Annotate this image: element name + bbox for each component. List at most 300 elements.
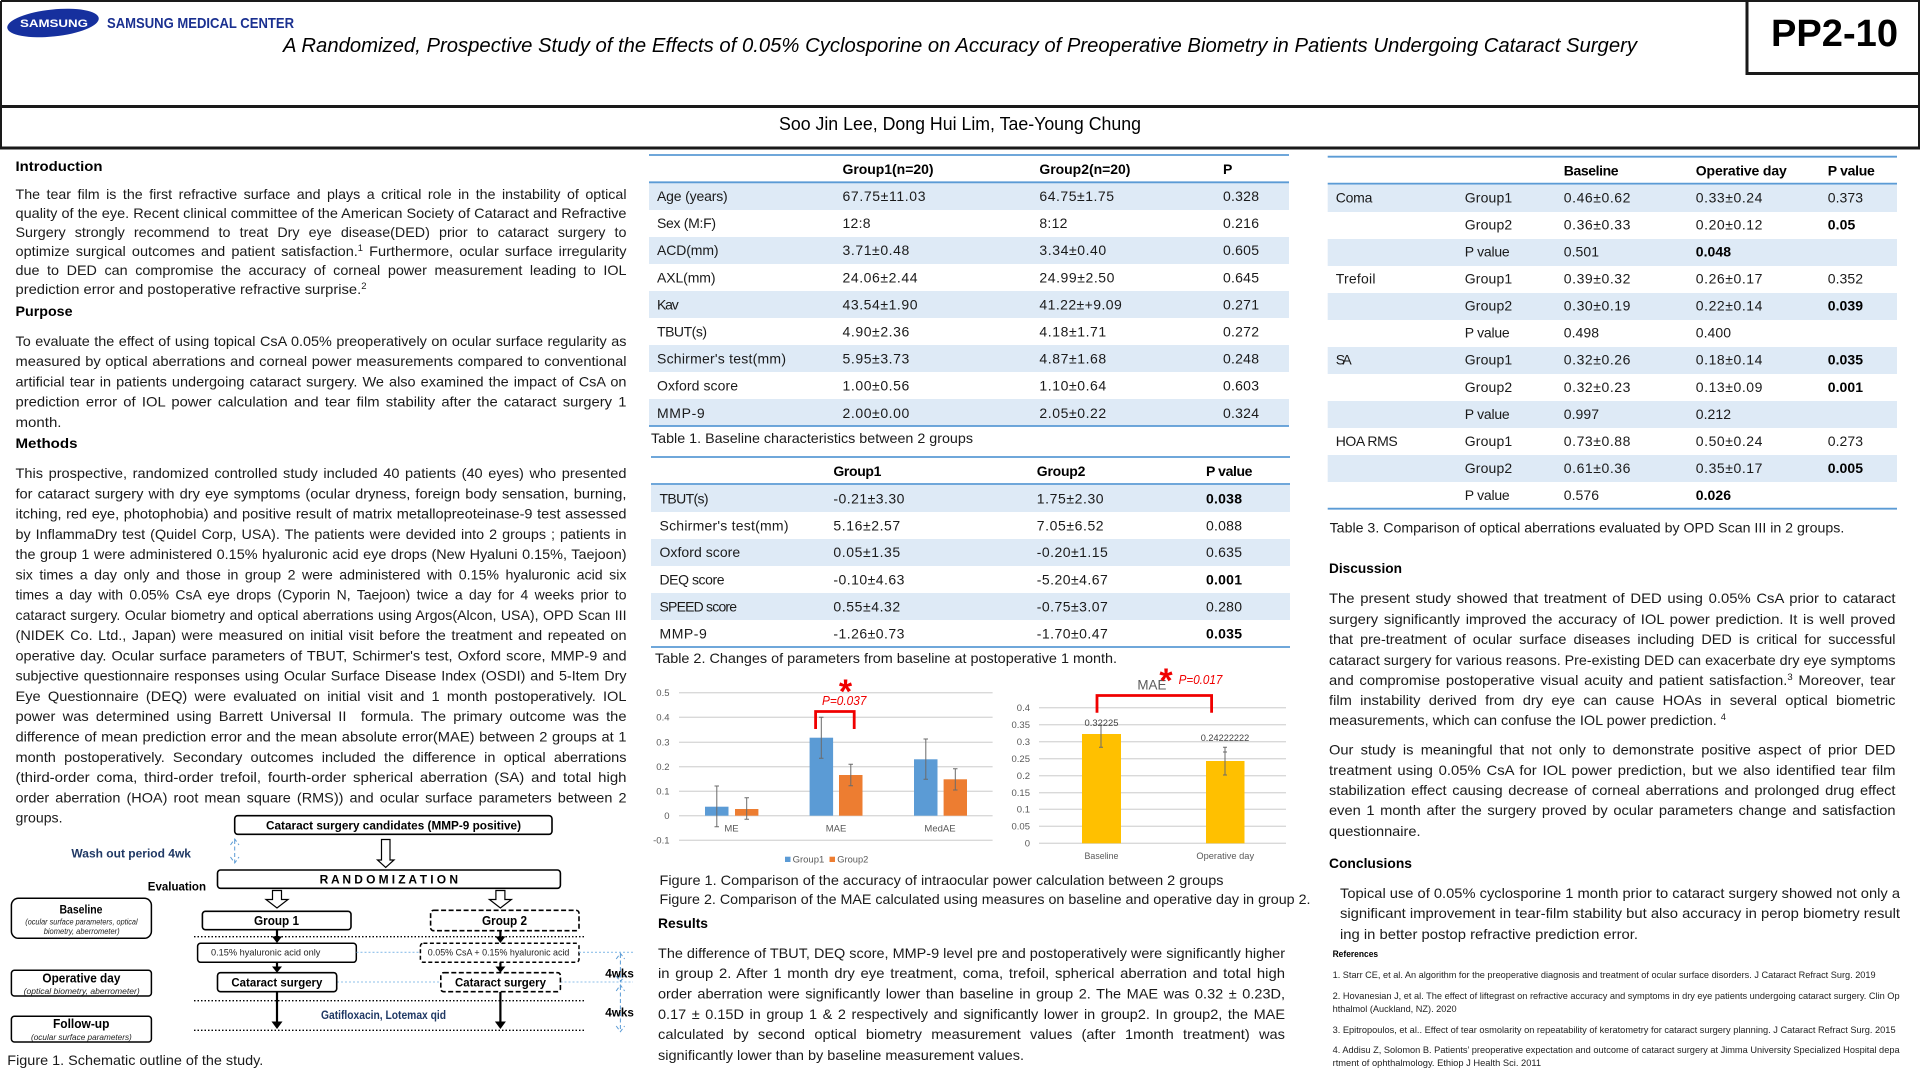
- text: methods body: order aberration (HOA) root mean square (RMS)) and ocular surface parameters between 2: [16, 789, 627, 805]
- y axis labels: 0.05: [1012, 822, 1030, 833]
- text: discussion first paragraph: surgery significantly improved the accuracy of IOL power prediction. It is well proved: [1329, 611, 1896, 627]
- table 1 rows: 41.22±+9.09: [1039, 296, 1122, 312]
- table 2 rows: 0.635: [1206, 544, 1242, 560]
- text: methods body: six times a day only and those in group 2 were administered with 0.15% hyaluronic acid six: [16, 566, 626, 582]
- text: introduction body: due to DED can compromise the accuracy of corneal power measurement leading to IOL: [16, 262, 627, 278]
- arrow: group 1 to hyaluronic: [276, 930, 278, 937]
- box: baseline evaluation: (ocular surface parameters, optical: [25, 917, 138, 926]
- text: introduction body: 2: [361, 281, 366, 291]
- y axis labels: -0.1: [653, 836, 670, 847]
- heading: conclusions: Conclusions: [1329, 855, 1412, 871]
- table 3 SA rows: 0.997: [1564, 406, 1599, 422]
- table 3 coma rows: 0.46±0.62: [1564, 189, 1631, 205]
- text: methods body: groups.: [16, 810, 62, 826]
- arrow: 4 weeks intervals: [616, 953, 625, 1032]
- table 2 header: Group1: [833, 463, 882, 479]
- y axis labels: 0.4: [1017, 703, 1030, 714]
- box: cataract surgery candidates: [235, 816, 552, 834]
- table 1 header: Group2(n=20): [1039, 161, 1130, 177]
- text: introduction body: 1: [358, 243, 363, 253]
- panel: references: [1333, 949, 1900, 1069]
- text: discussion second paragraph: even 1 month after the surgery proved by ocular parameters change and satisfaction: [1329, 802, 1896, 818]
- captions: figures 1 and 2: Figure 1. Comparison of the accuracy of intraocular power calculation between 2 groups: [660, 872, 1224, 888]
- captions: figures 1 and 2: [660, 872, 1310, 907]
- text: methods body: cataract surgery. Ocular biometry and optical aberrations using Argos(Alcon, USA), OPD Scan III: [16, 607, 626, 623]
- flowchart: schematic outline of the study: [7, 816, 634, 1068]
- p value label: P=0.017: [1179, 673, 1223, 687]
- table 3 HOA RMS rows: [1336, 433, 1863, 503]
- table 1 rows: 1.00±0.56: [842, 378, 910, 394]
- table 2 rows: -5.20±4.67: [1037, 572, 1108, 588]
- table 2 rows: 0.55±4.32: [833, 598, 900, 614]
- table 3 coma rows: Group1: [1465, 189, 1512, 205]
- category labels: Baseline: [1084, 851, 1118, 862]
- table 3 SA rows: 0.001: [1828, 379, 1863, 395]
- box: baseline evaluation: [11, 898, 151, 938]
- table 3 HOA RMS rows: HOA RMS: [1336, 433, 1398, 449]
- text: results body: significantly lower than by baseline measurement values.: [658, 1047, 1024, 1063]
- table 3 SA rows: 0.035: [1828, 352, 1863, 368]
- table 3 coma rows: 0.373: [1828, 189, 1863, 205]
- heading: references: References: [1333, 949, 1378, 960]
- text: results body: calculated by second optical biometry measurement values (after 1month treatment) was: [658, 1026, 1285, 1042]
- samsung logo: SAMSUNG: [20, 18, 88, 30]
- text: discussion first paragraph: 4: [1721, 712, 1726, 722]
- y axis labels: [1012, 703, 1030, 850]
- table 2 rows: -0.75±3.07: [1037, 598, 1108, 614]
- arrow: to randomization: [378, 840, 394, 868]
- y axis labels: 0.2: [1017, 771, 1030, 782]
- table 2 rows: 0.038: [1206, 490, 1242, 506]
- samsung logo: SAMSUNG MEDICAL CENTER: [107, 15, 294, 32]
- panel: purpose: [16, 303, 627, 430]
- box: cataract surgery candidates: Cataract surgery candidates (MMP-9 positive): [266, 818, 521, 832]
- text: discussion first paragraph: measurements, which can confuse the IOL power prediction.: [1329, 712, 1704, 728]
- text: methods body: operative day. Ocular surface parameters of TBUT, Schirmer's test, Oxford score, MMP-9 and: [16, 647, 626, 663]
- label: 4wks lower: 4wks: [605, 1006, 634, 1020]
- error bars: [1099, 724, 1227, 775]
- table 3 header: Baseline: [1564, 162, 1619, 178]
- text: introduction body: Furthermore, ocular surface irregularity: [363, 243, 626, 259]
- arrow: group 1 follow-up: [276, 992, 278, 1022]
- table 1 rows: [657, 188, 1259, 421]
- table 2 rows: SPEED score: [660, 598, 737, 614]
- text: purpose body: To evaluate the effect of using topical CsA 0.05% preoperatively on ocular surface regularity as: [16, 333, 626, 349]
- table 2 rows: [660, 490, 1242, 642]
- text: purpose body: prediction error of IOL power calculation and tear film stability after the cataract surgery 1: [16, 394, 627, 410]
- table 3 SA rows: SA: [1336, 352, 1352, 368]
- text: discussion first paragraph: and compromise postoperative visual acuity and patient satisfaction.: [1329, 672, 1762, 688]
- table 1 rows: 0.605: [1223, 242, 1259, 258]
- table 1 rows: 43.54±1.90: [842, 296, 918, 312]
- table 3 HOA RMS rows: 0.50±0.24: [1696, 433, 1763, 449]
- text: methods body: [16, 465, 627, 826]
- text: methods body: for cataract surgery with dry eye symptoms (ocular dryness, foreign body sensation, burning,: [16, 485, 626, 501]
- chart: accuracy of intraocular power calculation: [653, 673, 993, 866]
- text: results body: order aberration were significantly lower than baseline in group 2. The MAE was 0.32 ± 0.23D,: [658, 986, 1285, 1002]
- box: follow-up evaluation: (ocular surface parameters): [31, 1033, 132, 1042]
- table 2 rows: Schirmer's test(mm): [660, 517, 788, 533]
- table 1 rows: 24.99±2.50: [1039, 270, 1115, 286]
- table 2 rows: -0.10±4.63: [833, 572, 905, 588]
- panel: introduction: [16, 158, 627, 297]
- table 1 rows: 2.00±0.00: [842, 405, 910, 421]
- y axis labels: 0.5: [656, 688, 670, 699]
- y axis labels: 0.25: [1012, 754, 1030, 765]
- table 1 rows: 0.216: [1223, 215, 1259, 231]
- table 3 HOA RMS rows: P value: [1465, 487, 1510, 503]
- value labels: 0.32225: [1084, 718, 1118, 729]
- table 3 header: [1564, 162, 1875, 178]
- text: methods body: itching, red eye, photophobia) and positive result of matrix metallopreoteinase-9 test assessed: [16, 506, 626, 522]
- value labels: 0.24222222: [1201, 733, 1249, 744]
- y axis labels: 0.1: [1017, 805, 1030, 816]
- text: conclusions body: Topical use of 0.05% cyclosporine 1 month prior to cataract surgery showed not only a: [1340, 885, 1900, 901]
- table 3 SA rows: [1336, 352, 1863, 422]
- table 1 rows: ACD(mm): [657, 242, 719, 258]
- box: operative day evaluation: (optical biometry, aberrometer): [24, 987, 140, 996]
- table 3 SA rows: 0.13±0.09: [1696, 379, 1763, 395]
- table 1 rows: 4.90±2.36: [842, 324, 910, 340]
- panel: results: [658, 915, 1285, 1063]
- caption: table 1: Table 1. Baseline characteristics between 2 groups: [651, 430, 973, 446]
- p value label: P=0.037: [822, 694, 867, 708]
- label: evaluation: Evaluation: [148, 880, 206, 894]
- arrow: to group 2: [489, 890, 511, 908]
- table 3 HOA RMS rows: Group1: [1465, 433, 1512, 449]
- table 3 SA rows: 0.32±0.23: [1564, 379, 1631, 395]
- table 3 SA rows: Group1: [1465, 352, 1512, 368]
- text: reference list: 4. Addisu Z, Solomon B. Patients’ preoperative expectation and outcome of cataract surgery at Jimma University Specialized Hospital depa: [1333, 1045, 1900, 1056]
- table 3 trefoil rows: 0.22±0.14: [1696, 298, 1763, 314]
- label: wash out period: Wash out period 4wk: [71, 847, 191, 861]
- table 3 coma rows: 0.36±0.33: [1564, 216, 1631, 232]
- table 3 coma rows: 0.048: [1696, 244, 1731, 260]
- table 3 SA rows: Group2: [1465, 379, 1512, 395]
- text: methods body: Eye Questionnaire (DEQ) were evaluated on initial visit and 1 month postoperatively. IOL: [16, 688, 627, 704]
- table 1 rows: 8:12: [1039, 215, 1068, 231]
- table 1: baseline characteristics: [649, 155, 1289, 446]
- table 1 rows: 67.75±11.03: [842, 188, 926, 204]
- table 1 rows: 12:8: [842, 215, 871, 231]
- box: randomization: [218, 870, 560, 888]
- bars: group 1: [705, 738, 938, 816]
- text: introduction body: quality of the eye. Recent clinical committee of the American Society of Cataract and Refractive: [16, 205, 627, 221]
- table 3 coma rows: P value: [1465, 244, 1510, 260]
- caption: figure 1 schematic: Figure 1. Schematic outline of the study.: [7, 1052, 263, 1068]
- text: reference list: 3. Epitropoulos, et al.. Effect of tear osmolarity on repeatability of keratometry for cataract surgery planning. J Cataract Refract Surg. 2015: [1333, 1025, 1896, 1036]
- table 3 HOA RMS rows: 0.005: [1828, 460, 1863, 476]
- table 1 rows: Kav: [657, 296, 679, 312]
- box: cataract surgery group 1: Cataract surgery: [231, 976, 323, 990]
- text: purpose body: artificial tear in patients undergoing cataract surgery. We also examined the impact of CsA on: [16, 373, 626, 389]
- heading: purpose: Purpose: [16, 303, 73, 319]
- table 1 rows: 0.645: [1223, 270, 1259, 286]
- y axis labels: 0.3: [656, 738, 670, 749]
- panel: conclusions: [1329, 855, 1900, 942]
- heading: methods: Methods: [16, 435, 78, 451]
- table 3 trefoil rows: 0.498: [1564, 325, 1599, 341]
- significance asterisk: *: [1159, 662, 1173, 700]
- arrow: hyaluronic to surgery: [276, 962, 278, 967]
- arrow: group 2 follow-up: [499, 992, 501, 1022]
- category labels: MedAE: [924, 824, 956, 835]
- table 3 trefoil rows: [1336, 270, 1863, 341]
- category labels: [1084, 851, 1254, 862]
- text: discussion second paragraph: questionnaire.: [1329, 823, 1420, 839]
- table 3 HOA RMS rows: 0.273: [1828, 433, 1863, 449]
- box: baseline evaluation: Baseline: [60, 902, 103, 916]
- table 3 coma rows: [1336, 189, 1863, 260]
- text: reference list: 1. Starr CE, et al. An algorithm for the preoperative diagnosis and treatment of ocular surface disorders. J Cataract Refract Surg. 2019: [1333, 970, 1876, 981]
- text: methods body: month postoperatively. Secondary outcomes included the difference in optical aberrations: [16, 749, 626, 765]
- box: operative day evaluation: Operative day: [42, 970, 121, 985]
- table 1 rows: 2.05±0.22: [1039, 405, 1106, 421]
- heading: discussion: Discussion: [1329, 560, 1402, 576]
- text: discussion second paragraph: treatment using 0.05% CsA for IOL power prediction, but we also identified tear film: [1329, 762, 1896, 778]
- table 2 rows: -1.26±0.73: [833, 626, 905, 642]
- table 1 rows: 3.71±0.48: [842, 242, 910, 258]
- text: purpose body: month.: [16, 414, 62, 430]
- heading: introduction: Introduction: [16, 158, 102, 174]
- table 1 header: Group1(n=20): [842, 161, 934, 177]
- panel: methods: [16, 435, 627, 826]
- table 1 rows: 0.324: [1223, 405, 1259, 421]
- box: hyaluronic acid only: 0.15% hyaluronic acid only: [211, 948, 321, 958]
- y axis labels: 0.15: [1012, 788, 1030, 799]
- table 1 rows: Schirmer's test(mm): [657, 350, 786, 366]
- legend: Group2: [837, 854, 868, 866]
- legend: [785, 854, 868, 866]
- table 3 coma rows: 0.05: [1828, 216, 1856, 232]
- table 3 trefoil rows: 0.26±0.17: [1696, 270, 1763, 286]
- table 3 HOA RMS rows: Group2: [1465, 460, 1512, 476]
- text: introduction body: Surgery strongly recommend to treat Dry eye disease(DED) prior to cataract surgery to: [16, 224, 627, 240]
- table 3 HOA RMS rows: 0.576: [1564, 487, 1599, 503]
- text: reference list: rtment of ophthalmology. Ethiop J Health Sci. 2011: [1333, 1058, 1541, 1069]
- table 1 rows: 4.87±1.68: [1039, 350, 1106, 366]
- table 1 rows: 0.272: [1223, 324, 1259, 340]
- text: methods body: the group 1 were administered 0.15% hyaluronic acid eye drops (New Hyaluni 0.15%, Taejoon): [16, 546, 626, 562]
- arrow: csa to surgery: [499, 962, 501, 967]
- text: methods body: (NIDEK Co. Ltd., Japan) were measured on initial visit before the treatment and repeated on: [16, 627, 626, 643]
- box: follow-up evaluation: Follow-up: [53, 1016, 109, 1031]
- table 1 rows: 0.328: [1223, 188, 1259, 204]
- text: discussion first paragraph: cataract surgery for various reasons. Pre-existing DED can exacerbate dry eye symptoms: [1329, 652, 1896, 668]
- bars: group 2: [735, 775, 967, 816]
- label: 4wks upper: 4wks: [605, 967, 634, 981]
- table 2 rows: Oxford score: [660, 544, 740, 560]
- header banner: [0, 0, 1920, 148]
- category labels: ME: [724, 824, 739, 835]
- text: methods body: This prospective, randomized controlled study included 40 patients (40 eyes) who presented: [16, 465, 626, 481]
- table 3 SA rows: 0.32±0.26: [1564, 352, 1631, 368]
- value labels: [1084, 718, 1249, 744]
- table 2 rows: 0.001: [1206, 572, 1242, 588]
- table 1 rows: TBUT(s): [657, 324, 707, 340]
- text: methods body: (third-order coma, third-order trefoil, fourth-order spherical aberration (SA) and total high: [16, 769, 626, 785]
- table 3 HOA RMS rows: 0.35±0.17: [1696, 460, 1763, 476]
- y axis labels: 0.4: [656, 713, 670, 724]
- text: methods body: power was determined using Barrett Universal II formula. The primary outcome was the: [16, 708, 627, 724]
- text: purpose body: [16, 333, 627, 430]
- table 1 rows: 4.18±1.71: [1039, 324, 1106, 340]
- poster number box: PP2-10: [1771, 13, 1898, 55]
- table 3 SA rows: 0.212: [1696, 406, 1731, 422]
- table 3 HOA RMS rows: 0.61±0.36: [1564, 460, 1631, 476]
- table 1 rows: 0.248: [1223, 350, 1259, 366]
- box: group 1: [202, 911, 351, 930]
- table 3 trefoil rows: Group2: [1465, 298, 1512, 314]
- text: results body: [658, 945, 1285, 1063]
- text: purpose body: measured by optical aberrations and corneal power measurements compared to conventional: [16, 353, 626, 369]
- box: csa and hyaluronic acid: [420, 943, 579, 962]
- table 3 coma rows: Group2: [1465, 216, 1512, 232]
- box: cataract surgery group 1: [218, 973, 337, 992]
- table 2: changes from baseline: [651, 457, 1290, 666]
- samsung logo: [6, 5, 294, 41]
- table 3 trefoil rows: 0.30±0.19: [1564, 298, 1631, 314]
- significance asterisk: *: [839, 673, 853, 711]
- table 3 coma rows: 0.20±0.12: [1696, 216, 1763, 232]
- text: discussion first paragraph: 3: [1787, 672, 1793, 682]
- title: A Randomized, Prospective Study of the Effects of 0.05% Cyclosporine on Accuracy of Preoperative Biometry in Patients Undergoing Cataract Surgery: [282, 35, 1638, 57]
- text: reference list: 2. Hovanesian J, et al. The effect of liftegrast on refractive accuracy and symptoms in dry eye patients undergoing cataract surgery. Clin Op: [1333, 991, 1900, 1002]
- text: conclusions body: significant improvement in tear-film stability but also accuracy in perop biometry result: [1340, 905, 1900, 921]
- category labels: Operative day: [1196, 851, 1254, 862]
- table 2 rows: MMP-9: [660, 626, 707, 642]
- arrow: group 2 to csa: [499, 931, 501, 937]
- arrow: to group 1: [266, 890, 288, 908]
- text: conclusions body: ing in better postop refractive prediction error.: [1340, 926, 1638, 942]
- category labels: MAE: [826, 824, 846, 835]
- text: methods body: times a day with 0.05% CsA eye drops (Cyporin N, Taejoon) twice a day for 4 weeks prior to: [16, 587, 627, 603]
- table 2 header: P value: [1206, 463, 1253, 479]
- significance bracket: [816, 712, 854, 729]
- significance bracket: [1097, 696, 1212, 713]
- table 3 SA rows: 0.18±0.14: [1696, 352, 1763, 368]
- box: group 2: [431, 910, 579, 931]
- table 1 rows: 3.34±0.40: [1039, 242, 1106, 258]
- table 2 rows: 0.05±1.35: [833, 544, 900, 560]
- bars: [1082, 734, 1244, 843]
- table 3: optical aberrations: [1328, 157, 1897, 536]
- text: discussion first paragraph: film instability derived from dry eye can cause HOAs in several optical biometric: [1329, 692, 1896, 708]
- table 2 rows: 0.088: [1206, 517, 1242, 533]
- box: csa and hyaluronic acid: 0.05% CsA + 0.15% hyaluronic acid: [428, 948, 569, 958]
- text: introduction body: The tear film is the first refractive surface and plays a critical role in the instability of optical: [16, 186, 626, 202]
- table 3 coma rows: 0.33±0.24: [1696, 189, 1763, 205]
- box: baseline evaluation: biometry, aberrometer): [44, 927, 120, 936]
- text: results body: in group 2. After 1 month dry eye treatment, coma, trefoil, spherical aberration and total high: [658, 965, 1285, 981]
- table 3 HOA RMS rows: 0.73±0.88: [1564, 433, 1631, 449]
- table 2 rows: TBUT(s): [660, 490, 708, 506]
- table 3 header: Operative day: [1696, 162, 1787, 178]
- table 1 rows: 0.271: [1223, 296, 1259, 312]
- box: randomization: R A N D O M I Z A T I O N: [320, 872, 458, 886]
- table 3 trefoil rows: P value: [1465, 325, 1510, 341]
- text: conclusions body: [1340, 885, 1900, 942]
- table 1 rows: MMP-9: [657, 405, 705, 421]
- table 3 trefoil rows: Trefoil: [1336, 270, 1376, 286]
- heading: results: Results: [658, 915, 708, 931]
- category labels: [724, 824, 956, 835]
- text: discussion first paragraph: that pre-treatment of ocular surface diseases including DED is critical for successful: [1329, 631, 1896, 647]
- table 2 rows: DEQ score: [660, 572, 725, 588]
- box: group 2: Group 2: [482, 913, 527, 928]
- table 1 rows: 5.95±3.73: [842, 350, 910, 366]
- table 1 header: [842, 161, 1232, 177]
- y axis labels: 0: [664, 811, 670, 822]
- table 1 rows: 0.603: [1223, 378, 1259, 394]
- text: results body: The difference of TBUT, DEQ score, MMP-9 level pre and postoperatively were significantly higher: [658, 945, 1285, 961]
- table 3 trefoil rows: 0.39±0.32: [1564, 270, 1631, 286]
- legend: Group1: [793, 854, 824, 866]
- caption: table 2: Table 2. Changes of parameters from baseline at postoperative 1 month.: [655, 650, 1117, 666]
- authors: Soo Jin Lee, Dong Hui Lim, Tae-Young Chung: [779, 113, 1141, 134]
- chart title: MAE: [1137, 676, 1166, 692]
- box: cataract surgery group 2: Cataract surgery: [455, 976, 546, 990]
- table 3 coma rows: Coma: [1336, 189, 1373, 205]
- text: reference list: hthalmol (Auckland, NZ). 2020: [1333, 1004, 1457, 1015]
- captions: figures 1 and 2: Figure 2. Comparison of the MAE calculated using measures on baseline and operative day in group 2.: [660, 891, 1310, 907]
- chart: MAE baseline vs operative day: [1012, 662, 1286, 862]
- text: results body: 0.17 ± 0.15D in group 1 & 2 respectively and significantly lower in group2. In group2, the MAE: [658, 1006, 1285, 1022]
- table 2 header: [833, 463, 1253, 479]
- text: methods body: subjective questionnaire responses using Ocular Surface Disease Index (OSDI) and 5-Item Dry: [16, 668, 626, 684]
- table 1 rows: Oxford score: [657, 378, 738, 394]
- y axis labels: 0.35: [1012, 720, 1030, 731]
- table 3 trefoil rows: 0.352: [1828, 270, 1863, 286]
- table 2 rows: 0.035: [1206, 626, 1242, 642]
- table 2 rows: 5.16±2.57: [833, 517, 900, 533]
- table 2 rows: -0.20±1.15: [1037, 544, 1108, 560]
- box: follow-up evaluation: [11, 1016, 151, 1042]
- table 1 rows: 24.06±2.44: [842, 270, 918, 286]
- table 3 SA rows: P value: [1465, 406, 1510, 422]
- table 2 rows: 0.280: [1206, 598, 1242, 614]
- y axis labels: 0: [1025, 839, 1030, 850]
- text: introduction body: [16, 186, 627, 297]
- table 3 header: P value: [1828, 162, 1875, 178]
- table 3 trefoil rows: 0.400: [1696, 325, 1731, 341]
- text: discussion first paragraph: [1329, 590, 1896, 728]
- table 3 trefoil rows: Group1: [1465, 270, 1512, 286]
- text: discussion first paragraph: The present study showed that treatment of DED using 0.05% CsA prior to cataract: [1329, 590, 1896, 606]
- y axis labels: [653, 688, 670, 847]
- error bars: [714, 717, 958, 827]
- table 2 rows: 1.75±2.30: [1037, 490, 1104, 506]
- table 2 rows: -0.21±3.30: [833, 490, 905, 506]
- box: operative day evaluation: [11, 970, 151, 996]
- arrow: wash out double headed: [230, 839, 239, 863]
- text: methods body: difference of mean prediction error and the mean absolute error(MAE) between 2 groups at 1: [16, 728, 627, 744]
- table 2 rows: -1.70±0.47: [1037, 626, 1108, 642]
- box: group 1: Group 1: [254, 913, 299, 928]
- table 1 rows: Sex (M:F): [657, 215, 716, 231]
- table 2 rows: 7.05±6.52: [1037, 517, 1104, 533]
- text: discussion second paragraph: stabilization effect causing decrease of corneal aberrations and prolonged drug effect: [1329, 782, 1896, 798]
- text: methods body: by InflammaDry test (Quidel Corp, USA). The patients were devided into 2 groups ; patients in: [16, 526, 626, 542]
- panel: discussion: [1329, 560, 1896, 839]
- table 1 rows: 1.10±0.64: [1039, 378, 1106, 394]
- box: cataract surgery group 2: [441, 973, 560, 992]
- table 2 header: Group2: [1037, 463, 1086, 479]
- box: hyaluronic acid only: [198, 943, 356, 962]
- y axis labels: 0.3: [1017, 737, 1030, 748]
- y axis labels: 0.2: [656, 762, 670, 773]
- table 3 trefoil rows: 0.039: [1828, 298, 1863, 314]
